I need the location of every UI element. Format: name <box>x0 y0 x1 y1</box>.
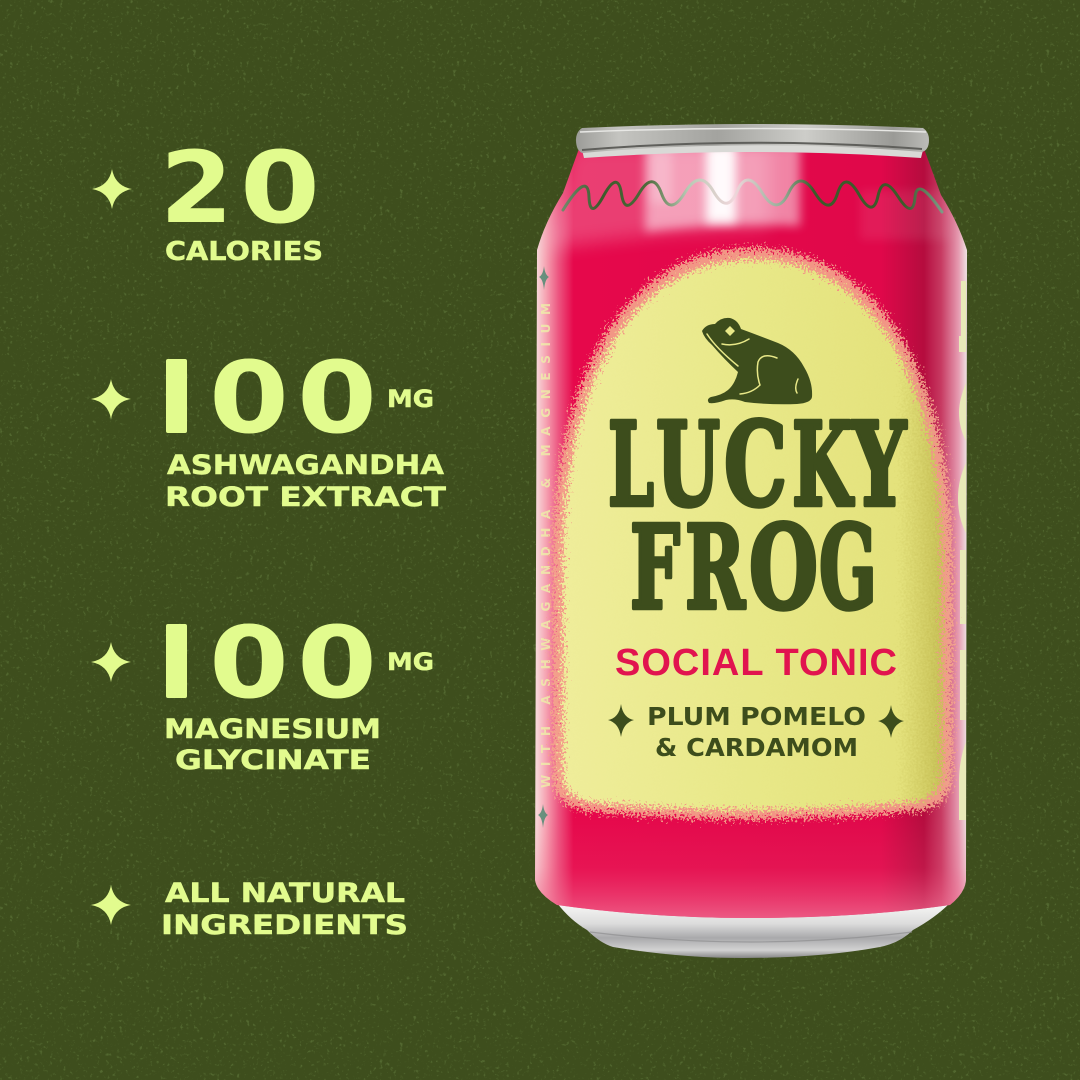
label: all natural ingredients: INGREDIENTS <box>161 910 408 941</box>
can base: silver bottom <box>557 903 950 958</box>
flavor: plum pomelo & cardamom: & CARDAMOM <box>655 733 858 762</box>
icon: sparkle 3 <box>91 642 131 682</box>
icon: sparkle 4 <box>91 885 131 925</box>
right side can lettering <box>958 281 966 820</box>
unit: mg: MG <box>387 385 434 413</box>
label: calories: CALORIES <box>165 237 323 267</box>
icon: flavor sparkle left <box>608 704 634 737</box>
number: 100: 0 <box>209 341 289 456</box>
wave line <box>563 180 942 212</box>
label: all natural ingredients: ALL NATURAL <box>165 878 405 909</box>
number: 20: 2 <box>160 131 233 246</box>
number: 100: 0 <box>297 606 377 721</box>
can body: pink <box>530 135 975 930</box>
small side sparkles <box>538 266 549 828</box>
stat: all natural ingredients <box>91 878 408 941</box>
can <box>530 124 975 958</box>
flavor: plum pomelo & cardamom: PLUM POMELO <box>647 702 866 731</box>
brand name: lucky frog <box>608 398 907 636</box>
icon: frog <box>702 318 812 404</box>
number: 100 <box>164 341 377 456</box>
brand name: lucky frog: U <box>656 398 720 533</box>
brand name: lucky frog: Y <box>851 398 907 533</box>
label: magnesium glycinate <box>164 714 381 776</box>
number: 100: 1 <box>164 346 188 453</box>
stat: 100 mg magnesium <box>91 606 434 776</box>
label: magnesium glycinate: GLYCINATE <box>175 745 371 776</box>
number: 100: 0 <box>297 341 377 456</box>
label: ashwagandha root extract: ASHWAGANDHA <box>167 450 444 481</box>
brand name: lucky frog: O <box>749 501 818 636</box>
brand name: lucky frog: L <box>608 398 654 533</box>
label: all natural ingredients <box>161 878 408 941</box>
brand name: lucky frog: R <box>685 501 746 636</box>
lower body sheen <box>535 833 966 918</box>
neck highlights <box>545 145 950 250</box>
icon: flavor sparkle right <box>878 705 904 738</box>
number: 100: 0 <box>209 606 289 721</box>
stat: 100 mg ashwagandha <box>91 341 447 513</box>
flavor: plum pomelo & cardamom <box>647 702 866 762</box>
number: 20: 0 <box>240 131 320 246</box>
brand name: lucky frog: K <box>792 398 854 533</box>
stat: 20 calories <box>92 131 323 267</box>
label: ashwagandha root extract: ROOT EXTRACT <box>165 482 447 513</box>
label: magnesium glycinate: MAGNESIUM <box>164 714 381 745</box>
label: ashwagandha root extract <box>165 450 447 513</box>
label panel <box>553 248 952 820</box>
brand name: lucky frog: F <box>630 501 680 636</box>
brand name: lucky frog: C <box>724 398 787 533</box>
product name: social tonic: SOCIAL TONIC <box>615 642 897 684</box>
unit: mg: MG <box>387 648 434 676</box>
can lid: silver rim <box>576 124 929 158</box>
number: 100: 1 <box>164 611 188 718</box>
number: 100 <box>164 606 377 721</box>
icon: sparkle 2 <box>91 379 131 419</box>
left side vertical text: WITH ASHWAGANDHA & MAGNESIUM <box>539 303 553 788</box>
icon: sparkle 1 <box>92 169 132 209</box>
brand name: lucky frog: G <box>819 501 877 636</box>
